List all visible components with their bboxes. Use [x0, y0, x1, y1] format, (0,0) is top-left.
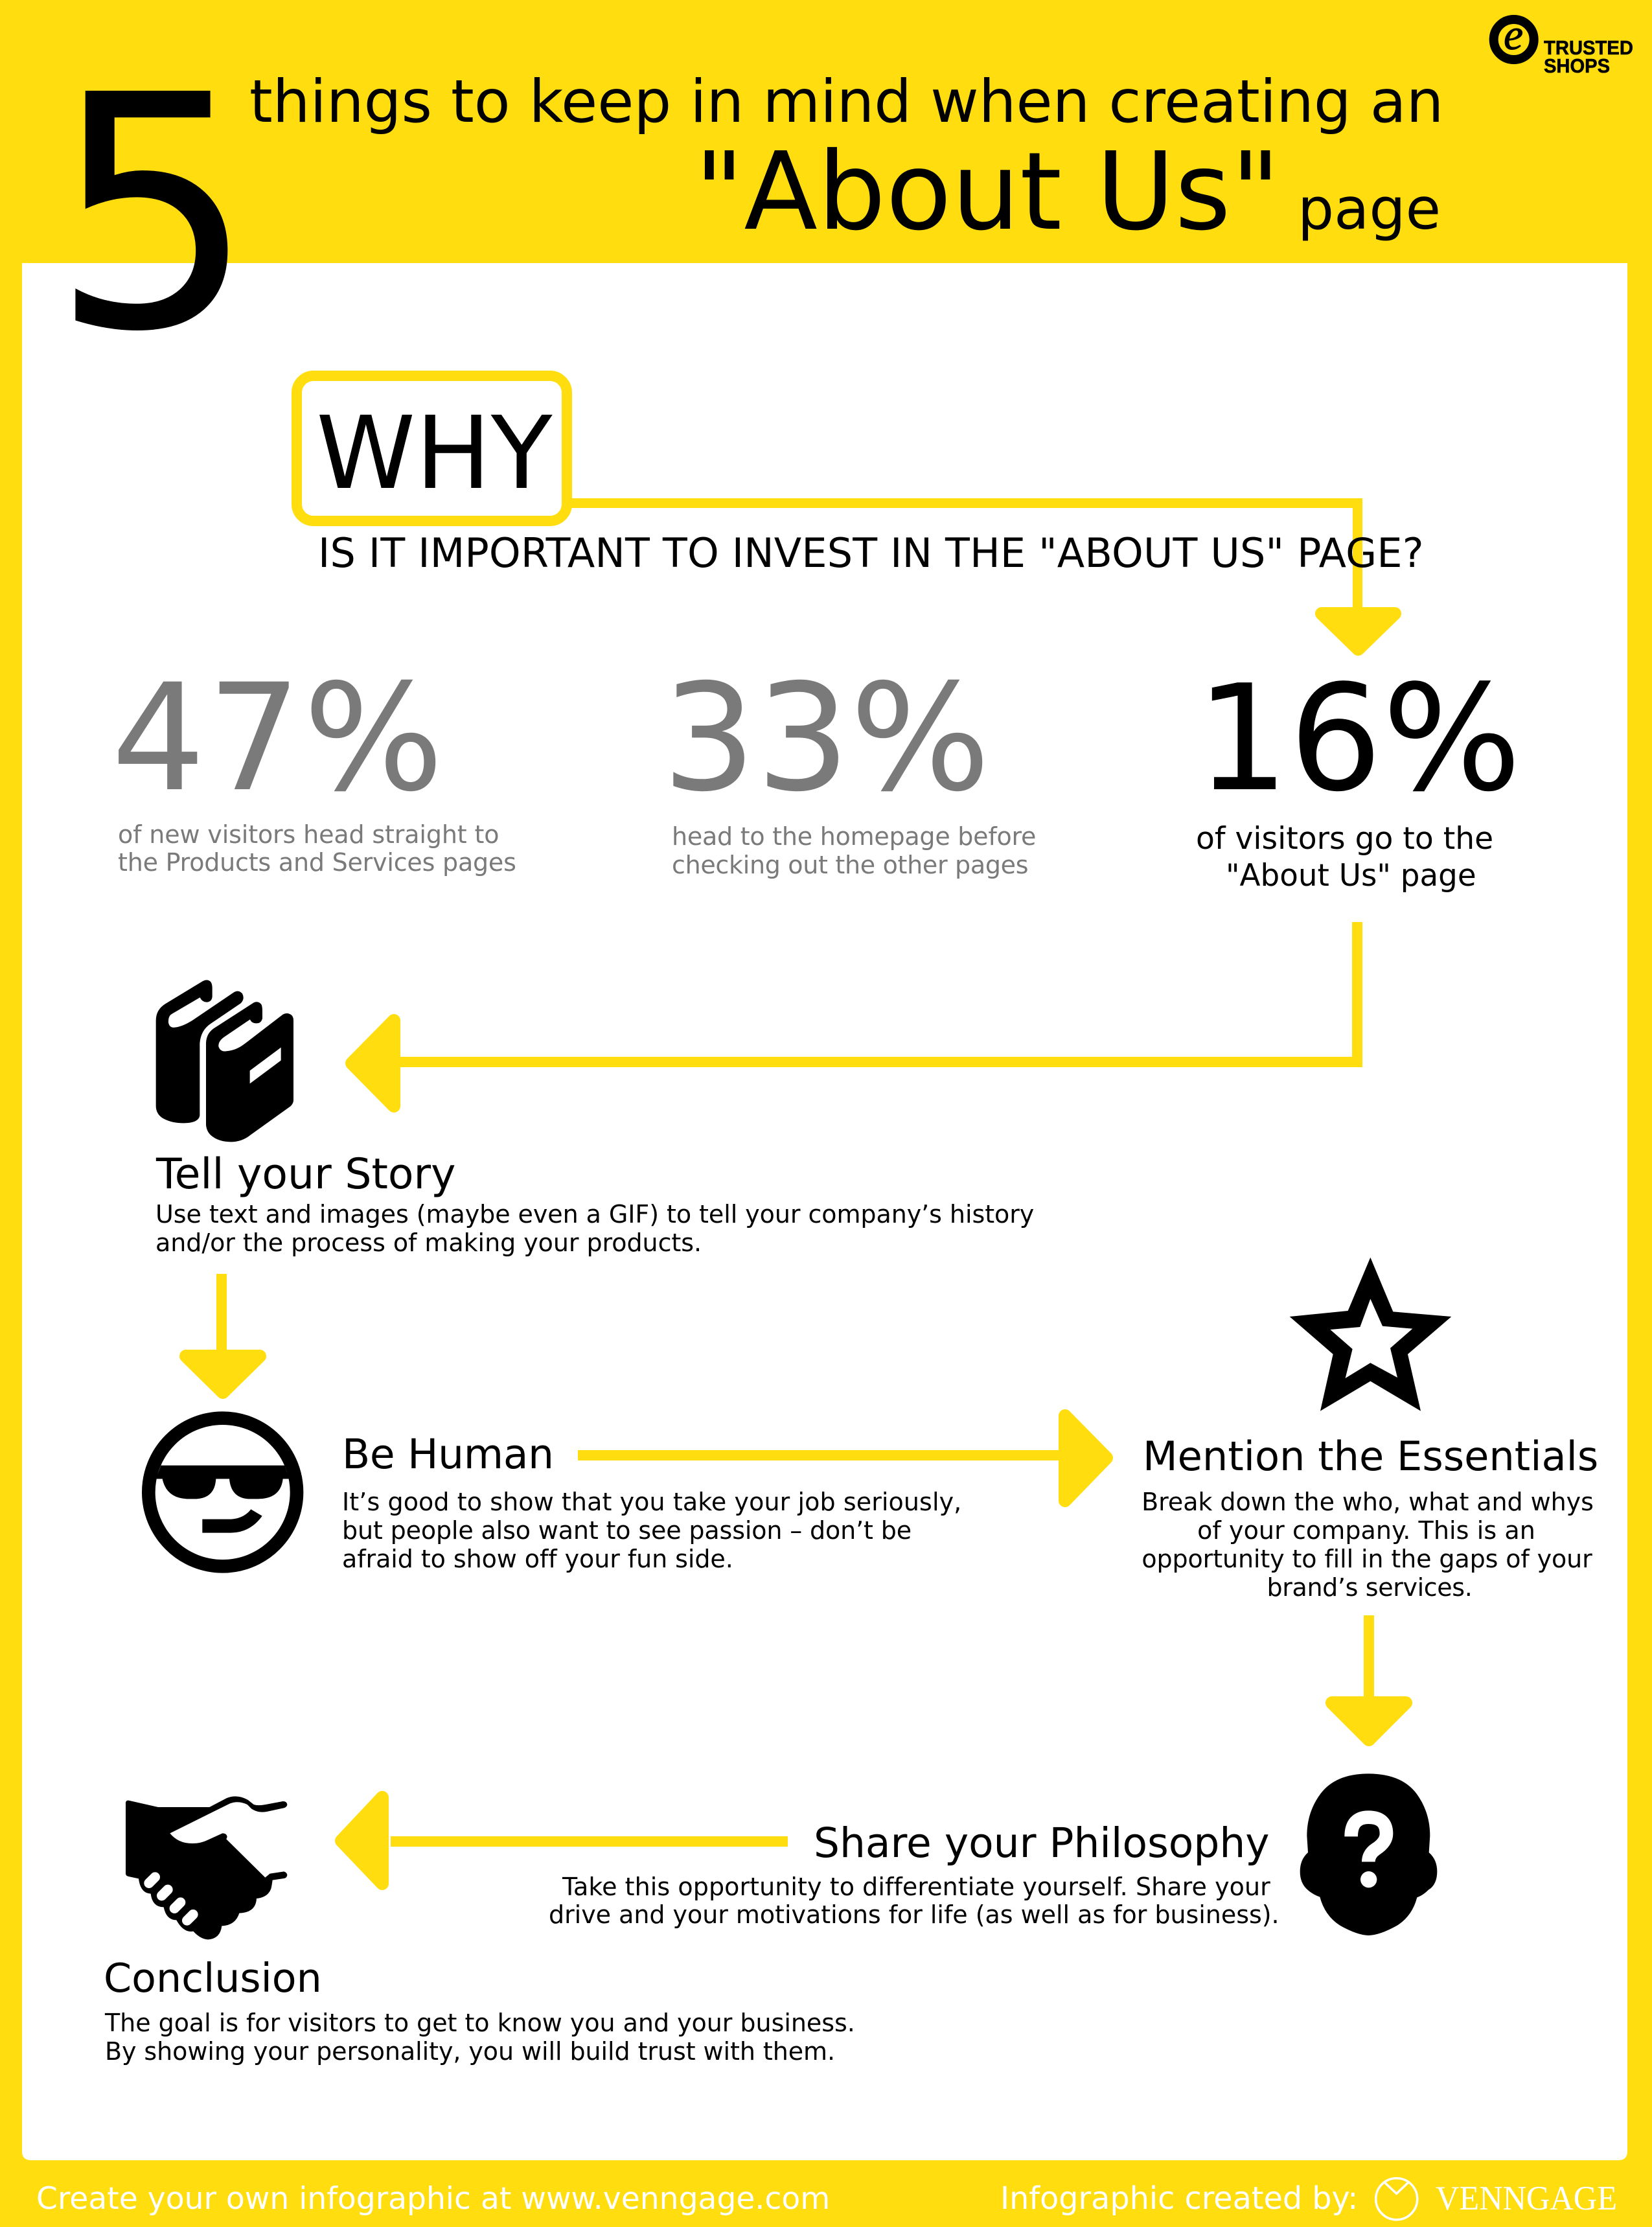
title line one: things to keep in mind when creating an	[249, 67, 1443, 136]
stat: 33%	[662, 652, 1036, 879]
stat: 16%: of visitors go to the	[1196, 821, 1493, 857]
body text	[155, 1200, 1034, 1257]
section: mention the essentials	[1141, 1258, 1598, 1602]
arrow: 16% to story	[352, 922, 1362, 1106]
icon: books	[156, 980, 293, 1142]
body text: Break down the who, what and whys	[1141, 1488, 1594, 1516]
arrow: essentials to philosophy	[1332, 1615, 1406, 1740]
body text: afraid to show off your fun side.	[342, 1545, 733, 1573]
title numeral: 5	[51, 27, 256, 402]
body text: It’s good to show that you take your job seriously,	[342, 1488, 961, 1516]
stat: 33%: head to the homepage before	[672, 822, 1036, 851]
arrow: philosophy to conclusion	[341, 1797, 788, 1884]
stat: 47%	[111, 652, 516, 877]
section: conclusion	[104, 1796, 855, 2066]
body text	[104, 2009, 855, 2066]
stat: 16%: "About Us" page	[1226, 859, 1476, 894]
body text: but people also want to see passion – don’t be	[342, 1516, 912, 1545]
stat: 47%: the Products and Services pages	[118, 848, 516, 877]
body text: drive and your motivations for life (as well as for business).	[549, 1900, 1279, 1929]
footer: credit: Infographic created by:	[1000, 2181, 1358, 2217]
icon: head with question mark	[1300, 1773, 1437, 1935]
section: tell your story	[155, 980, 1034, 1257]
footer	[36, 2178, 1617, 2220]
body text	[549, 1873, 1279, 1929]
body text: opportunity to fill in the gaps of your	[1141, 1545, 1592, 1573]
body text: Take this opportunity to differentiate yourself. Share your	[562, 1873, 1270, 1901]
body text: Use text and images (maybe even a GIF) to tell your company’s history	[155, 1200, 1034, 1229]
icon: venngage mark	[1376, 2178, 1417, 2220]
subheading: IS IT IMPORTANT TO INVEST IN THE "ABOUT US" PAGE?	[318, 529, 1424, 577]
stat: 33%: 33%	[662, 652, 991, 824]
body text: By showing your personality, you will build trust with them.	[105, 2037, 835, 2066]
heading: Mention the Essentials	[1143, 1433, 1598, 1480]
body text	[1141, 1488, 1594, 1602]
heading: Be Human	[342, 1431, 554, 1478]
logo: Trusted Shops: SHOPS	[1544, 54, 1610, 77]
heading: Conclusion	[104, 1955, 322, 2002]
WHY box: WHY	[316, 395, 553, 512]
body text: The goal is for visitors to get to know you and your business.	[104, 2009, 855, 2037]
heading: Tell your Story	[155, 1150, 456, 1199]
panel: why section	[297, 376, 1424, 649]
heading: Share your Philosophy	[814, 1819, 1270, 1867]
section: share your philosophy	[549, 1773, 1437, 1935]
body text: and/or the process of making your products.	[155, 1229, 702, 1257]
section: be human	[148, 1418, 961, 1573]
stat: 33%: checking out the other pages	[672, 851, 1028, 879]
body text	[342, 1488, 961, 1573]
stat: 16%: 16%	[1196, 654, 1521, 824]
title emphasis: "About Us"	[694, 130, 1280, 255]
connector arrow: why to 16%	[570, 498, 1395, 649]
logo: Trusted Shops	[1494, 10, 1633, 77]
logo: Trusted Shops: TRUSTED	[1544, 36, 1633, 59]
title	[51, 27, 1443, 402]
stat: 47%: of new visitors head straight to	[118, 820, 499, 849]
footer: venngage wordmark: VENNGAGE	[1436, 2180, 1617, 2217]
icon: face with sunglasses	[148, 1418, 297, 1566]
logo: Trusted Shops: e	[1504, 10, 1523, 59]
title end word: page	[1298, 176, 1441, 242]
footer: call to action: Create your own infographic at www.venngage.com	[36, 2181, 830, 2217]
body text: of your company. This is an	[1197, 1516, 1535, 1545]
body text: brand’s services.	[1267, 1573, 1472, 1602]
icon: handshake	[126, 1796, 287, 1939]
arrow: story to human	[186, 1274, 260, 1392]
arrow: human to essentials	[578, 1416, 1107, 1501]
icon: star	[1290, 1258, 1451, 1411]
stat: 47%: 47%	[111, 652, 446, 824]
